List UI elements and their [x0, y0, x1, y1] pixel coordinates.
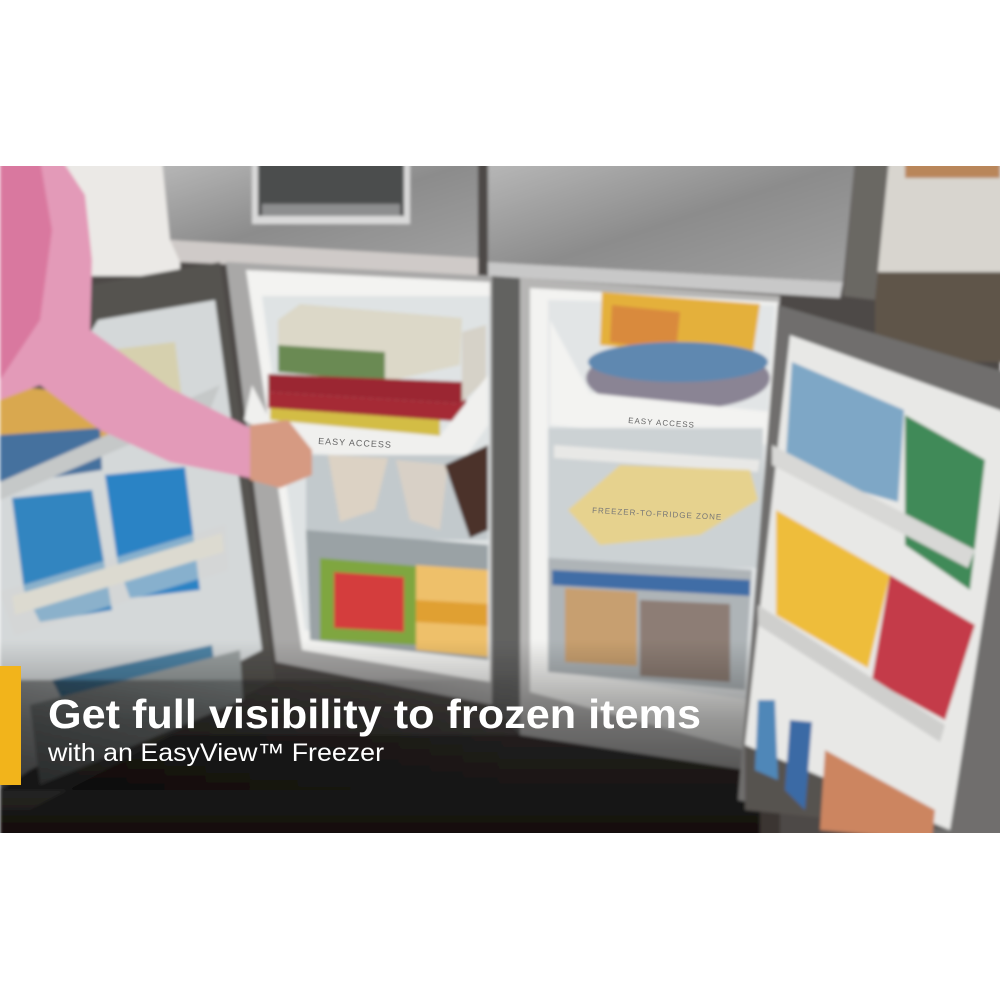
bin label: FREEZER-TO-FRIDGE ZONE: [592, 506, 722, 522]
center divider: [492, 276, 520, 735]
open right door: [738, 305, 1000, 840]
tray label right: EASY ACCESS: [628, 416, 695, 430]
steel upper doors: [162, 160, 889, 300]
open left door: [0, 262, 275, 810]
left text shade: [0, 680, 520, 790]
freezer interior right: [520, 278, 780, 770]
yellow accent bar: [0, 666, 21, 785]
right upper shelf: [550, 292, 772, 445]
freezer interior left: [226, 262, 492, 705]
tray label left: EASY ACCESS: [318, 436, 392, 450]
water dispenser: [252, 160, 410, 224]
easy access tray left: [242, 378, 488, 456]
lower left bins: [306, 445, 488, 660]
dark overlay at bottom: [0, 640, 760, 840]
wall and counter background: [60, 160, 1000, 362]
subheading: with an EasyView™ Freezer: [47, 739, 384, 767]
arm and pink sleeve: [0, 160, 312, 488]
photo: open refrigerator freezer: [0, 160, 1000, 840]
headline: Get full visibility to frozen items: [48, 691, 701, 737]
floor: [0, 735, 780, 840]
right bins: [548, 428, 763, 690]
upper left drawer: food boxes: [268, 304, 486, 436]
